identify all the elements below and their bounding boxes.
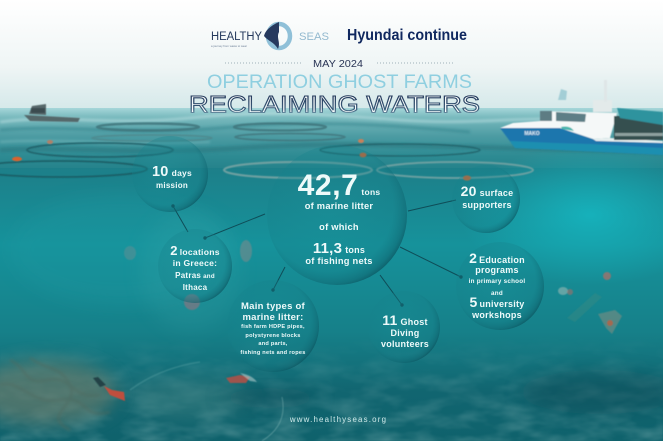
bubble: 2 locations in Greece: Patras and	[175, 271, 215, 280]
bubble: 2 locations in Greece: in Greece:	[173, 258, 217, 268]
sea floor: nets and texture	[0, 350, 663, 441]
bubble: 11 Ghost Diving volunteers: 11 Ghost	[382, 312, 428, 328]
bubble: main types of marine litter: polystyrene blocks	[245, 333, 301, 339]
bubble: 11 Ghost Diving volunteers: volunteers	[381, 339, 429, 349]
background: sky	[0, 0, 663, 112]
bubble: main types of marine litter: and parts,	[258, 341, 288, 347]
bubble: 20 surface supporters: supporters	[462, 200, 512, 210]
background: sea surface	[0, 108, 663, 174]
logo: Healthy Seas: a journey from waste to wear	[211, 44, 247, 48]
bubble: 2 locations in Greece: 2locations	[170, 243, 220, 258]
logo: Healthy Seas: HEALTHY	[211, 31, 262, 43]
bubble: main total: of marine litter	[305, 201, 373, 211]
bubble: main total	[267, 145, 407, 285]
title: Reclaiming Waters: RECLAIMING WATERS	[189, 92, 480, 118]
logo: Healthy Seas: SEAS	[299, 31, 329, 43]
bubble: main types of marine litter: fishing nets and ropes	[240, 350, 306, 356]
bubble: education programs: in primary school	[469, 278, 525, 285]
date with dotted rules: MAY 2024	[313, 59, 363, 70]
website url: www.healthyseas.org	[289, 415, 387, 424]
fish farm rings	[0, 124, 533, 178]
buoys	[12, 139, 471, 181]
bubble: 11 Ghost Diving volunteers	[368, 291, 440, 363]
bubble: main types of marine litter: marine litter:	[242, 312, 304, 323]
bubble: education programs	[456, 242, 544, 330]
bubble: main types of marine litter: fish farm HDPE pipes,	[241, 324, 305, 330]
bubble: 2 locations in Greece: Ithaca	[183, 283, 208, 292]
bubble: education programs: 2Education	[469, 250, 525, 266]
bubble: main types of marine litter: Main types of	[241, 301, 306, 312]
bubble: 11 Ghost Diving volunteers: Diving	[390, 328, 420, 338]
bubble: 2 locations in Greece	[158, 229, 232, 303]
vessel name: MAKO	[524, 131, 540, 137]
bubble: 10 days mission	[132, 136, 208, 212]
bubble: 20 surface supporters	[452, 165, 520, 233]
bubble: main total: of fishing nets	[305, 256, 373, 266]
jellyfish and divers	[93, 240, 622, 401]
bubble: 10 days mission: 10 days	[152, 164, 192, 180]
vessel MAKO	[500, 80, 663, 155]
title: Operation Ghost Farms: OPERATION GHOST FARMS	[207, 71, 472, 93]
bubble: education programs: programs	[475, 265, 519, 275]
logo: Hyundai continue: Hyundai continue	[347, 27, 467, 44]
bubble: main total: 11,3 tons	[313, 240, 365, 257]
bubble: 20 surface supporters: 20 surface	[461, 183, 513, 199]
bubble: education programs: and	[491, 290, 503, 297]
logo: Healthy Seas	[211, 22, 329, 49]
background: underwater	[0, 168, 663, 441]
bubble: main total: 42,7 tons	[298, 169, 380, 202]
bubble: education programs: 5university	[469, 294, 525, 310]
bubble: 10 days mission: mission	[156, 181, 188, 190]
small work boat	[24, 104, 80, 122]
bubble: main total: of which	[319, 222, 359, 232]
bubble: education programs: workshops	[471, 310, 522, 320]
bubble: main types of marine litter	[227, 280, 319, 372]
connector lines	[172, 200, 462, 306]
wave highlights	[0, 114, 663, 152]
